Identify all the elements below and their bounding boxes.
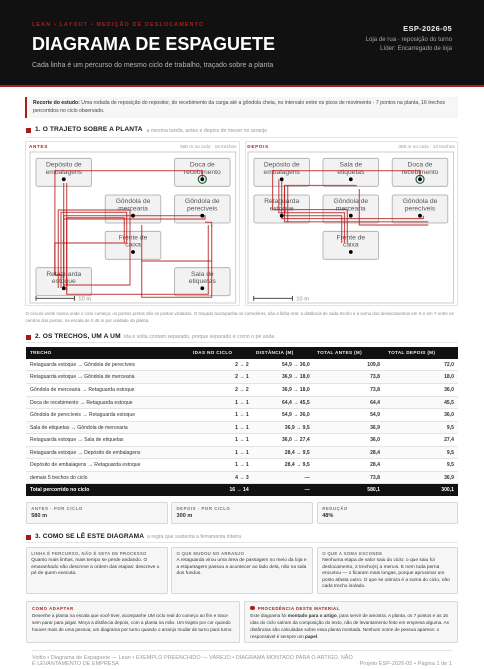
note: a soma: posto afasta outro. O que se otimiza é a soma do ciclo, não: [322, 578, 450, 583]
section 2 heading: [26, 332, 274, 340]
note: o que mudou: A retaguarda virou uma área de passagem no meio da loja e: [176, 558, 307, 563]
icon: red marker: [250, 606, 255, 610]
section 3 heading: 3. COMO SE LÊ ESTE DIAGRAMA: [35, 532, 144, 540]
chart: antes: Gôndola de: [116, 198, 151, 205]
callout: procedencia: Este diagrama foi montado para o artigo, para servir de amostra. A planta, os 7 pontos e as 16: [250, 613, 448, 618]
chart: antes: etiquetas: [189, 278, 217, 285]
table row: [26, 434, 458, 447]
table row: 28,4 → 9,5: [285, 450, 310, 456]
table row: 54,9: [370, 412, 380, 418]
chart: depois: recebimento: [402, 169, 439, 176]
note: a soma: encurtou — 1 ficaram mais longas, porque aproximar um: [322, 571, 444, 576]
table total row: [26, 484, 458, 496]
chart: depois: caixa: [343, 242, 359, 249]
table total row: 16 → 14: [229, 487, 249, 493]
table row: 36,0: [370, 437, 380, 443]
table: trechos: [26, 347, 458, 496]
table row: [26, 397, 458, 409]
stat: reducao: 48%: [322, 513, 333, 519]
study note: [25, 97, 458, 118]
chart: antes: Depósito de: [46, 162, 82, 169]
table row: 1 → 1: [235, 437, 249, 443]
chart: depois: 300 m no ciclo · 14 trechos: [398, 144, 455, 149]
chart: depois: Retaguarda: [264, 198, 299, 205]
table row: 1 → 1: [235, 450, 249, 456]
table total row: Total percorrido no ciclo: [30, 487, 89, 493]
table header: DISTÂNCIA (M): [256, 350, 294, 355]
section 3 heading: [26, 532, 241, 540]
footer left: Voitto • Diagrama de Espaguete — Lean • EXEMPLO PREENCHIDO — VAREJO • DIAGRAMA MONTADO PARA O ARTIGO, NÃO: [32, 654, 353, 660]
stat: depois: [171, 502, 313, 524]
chart: antes: ANTES: [29, 144, 48, 149]
chart: depois: DEPOIS: [247, 144, 269, 149]
panel: depois: [244, 141, 458, 306]
callout: procedencia: idas do ciclo saíram da composição do texto, não de levantamento feito em empresa alguma. As: [250, 620, 449, 625]
callout: como adaptar: Desenhe a planta na escala que você tiver, acompanhe UM ciclo real do começo ao fim e trace: [32, 613, 228, 618]
note: a soma: O QUE A SOMA ESCONDE: [322, 551, 382, 556]
chart: depois: Doca de: [408, 162, 433, 169]
note: a soma: deslocamento, 2 trecho(s) a menos. E nem toda perna: [322, 565, 439, 570]
table row: Retaguarda estoque → Gôndola de perecíveis: [30, 362, 135, 368]
diagram caption: O círculo verde marca onde o ciclo começa; os pontos pretos são os postos visitados. O traçado acompanha os corredores, não a linha reta: a distância de cada trecho é a soma dos deslocamentos em X e em Y entre os: [26, 310, 454, 316]
table row: [26, 472, 458, 484]
document code: ESP-2026-05: [403, 24, 452, 32]
callout: procedencia: responsável é sempre um papel.: [250, 634, 318, 639]
chart: depois: mercearia: [336, 205, 366, 212]
table row: Retaguarda estoque → Sala de etiquetas: [30, 437, 123, 443]
title: DIAGRAMA DE ESPAGUETE: [32, 34, 275, 54]
chart: depois: [247, 144, 455, 303]
note: o que mudou: dos fundos.: [176, 571, 202, 576]
table header: TOTAL DEPOIS (M): [388, 350, 435, 355]
table row: [26, 409, 458, 422]
chart: antes: caixa: [125, 242, 141, 249]
table total row: 300,1: [441, 487, 454, 493]
table row: 36,9 → 9,5: [285, 425, 310, 431]
table row: 54,9 → 36,0: [282, 362, 310, 368]
table row: Sala de etiquetas → Gôndola de mercearia: [30, 425, 128, 431]
table row: 36,0: [444, 412, 454, 418]
stat: depois: DEPOIS · POR CICLO: [176, 506, 230, 511]
chart: antes: Doca de: [190, 162, 215, 169]
stat: reducao: REDUÇÃO: [322, 506, 348, 511]
table row: 36,9 → 18,0: [282, 374, 310, 380]
note: linha e percurso: [26, 547, 168, 594]
chart: antes: Sala de: [191, 271, 214, 278]
table row: Gôndola de perecíveis → Retaguarda estoque: [30, 412, 135, 418]
note: o que mudou: [171, 547, 313, 594]
note: o que mudou: O QUE MUDOU NO ARRANJO: [176, 551, 244, 556]
chart: depois: Gôndola de: [334, 198, 368, 205]
table row: Retaguarda estoque → Depósito de embalagens: [30, 450, 140, 456]
diagram caption: [26, 310, 454, 323]
chart: depois: embalagens: [263, 169, 301, 176]
table row: 1 → 1: [235, 412, 249, 418]
footer left: É LEVANTAMENTO DE EMPRESA: [32, 661, 119, 667]
callout: procedencia: distâncias são calculadas sobre essa planta montada. Nenhum nome de pessoa aparece: o: [250, 627, 439, 632]
stat: depois: 300 m: [176, 513, 192, 519]
panel: antes: [25, 141, 240, 306]
table row: 28,4: [370, 450, 380, 456]
chart: depois: Depósito de: [264, 162, 300, 169]
table row: 27,4: [444, 437, 454, 443]
table row: 2 → 2: [235, 362, 249, 368]
note: linha e percurso: pé de quem executa.: [31, 571, 76, 576]
table row: [26, 371, 458, 384]
chart: depois: Gôndola de: [403, 198, 438, 205]
table row: 28,4: [370, 462, 380, 468]
table row: 2 → 1: [235, 374, 249, 380]
callout: procedencia: PROCEDÊNCIA DESTE MATERIAL: [258, 606, 340, 611]
table row: 72,0: [444, 362, 454, 368]
stat: antes: 580 m: [31, 513, 47, 519]
section 2 heading: ida e volta contam separado, porque separado é como o pé anda: [124, 334, 274, 340]
chart: antes: embalagens: [46, 169, 83, 176]
header band: [0, 0, 484, 87]
table row: 9,5: [447, 450, 454, 456]
chart: antes: Frente de: [119, 234, 148, 241]
table row: 54,9 → 36,0: [282, 412, 310, 418]
table header: IDAS NO CICLO: [193, 350, 232, 355]
chart: antes: perecíveis: [187, 205, 218, 212]
chart: depois: etiquetas: [337, 169, 365, 176]
footer right: Projeto ESP-2026-05 • Página 1 de 1: [360, 661, 452, 667]
chart: antes: Gôndola de: [185, 198, 220, 205]
study note: Recorte do estudo: Uma rodada de reposição do repositor, do recebimento da carga até a gôndola cheia, no intervalo entre os picos de movimento · 7 pontos na planta, 16 trechos: [33, 100, 445, 106]
table row: 36,0 → 27,4: [282, 437, 310, 443]
table row: [26, 459, 458, 472]
stat: antes: ANTES · POR CICLO: [31, 506, 83, 511]
study note: percorridos no ciclo observado.: [33, 108, 104, 114]
chart: depois: perecíveis: [405, 205, 436, 212]
callout: como adaptar: [26, 601, 240, 643]
table row: demais 5 trechos do ciclo: [30, 475, 87, 481]
document meta: [366, 36, 452, 52]
eyebrow: LEAN • LAYOUT • MEDIÇÃO DE DESLOCAMENTO: [32, 22, 204, 28]
table row: 1 → 1: [235, 462, 249, 468]
table row: [26, 447, 458, 459]
section 1 heading: a mesma tarefa, antes e depois de mexer no arranjo: [146, 128, 267, 134]
table header: [26, 347, 458, 359]
section 1 heading: 1. O TRAJETO SOBRE A PLANTA: [35, 126, 143, 133]
document meta: Líder: Encarregado de loja: [380, 45, 452, 52]
table row: 73,8: [370, 374, 380, 380]
section 3 heading: a regra que sustenta a ferramenta inteira: [147, 534, 241, 540]
note: linha e percurso: Quanto mais linhas, mais tempo se perde andando. O: [31, 558, 147, 563]
table header: TRECHO: [30, 350, 52, 355]
table total row: 580,1: [367, 487, 380, 493]
note: linha e percurso: emaranhado não descreve a ordem das etapas: descreve o: [31, 565, 159, 570]
table row: 73,8: [370, 475, 380, 481]
chart: antes: 580 m no ciclo · 16 trechos: [180, 144, 237, 149]
table row: 2 → 2: [235, 387, 249, 393]
table row: [26, 422, 458, 434]
chart: antes: 10 m: [78, 296, 91, 302]
chart: antes: recebimento: [184, 169, 221, 176]
chart: depois: estoque: [270, 205, 294, 212]
table row: [26, 359, 458, 371]
diagram caption: centros dos postos, na escala de 0,45 m por unidade da planta.: [26, 318, 149, 322]
section 2 heading: 2. OS TRECHOS, UM A UM: [35, 332, 121, 340]
table row: 36,0: [444, 387, 454, 393]
table row: 73,8: [370, 387, 380, 393]
table row: 28,4 → 9,5: [285, 462, 310, 468]
section 1 heading: [26, 126, 267, 134]
table row: Retaguarda estoque → Gôndola de mercearia: [30, 374, 134, 380]
chart: depois: 10 m: [296, 296, 309, 302]
callout: como adaptar: COMO ADAPTAR: [32, 606, 74, 611]
note: o que mudou: a etiquetagem passou a acontecer ao lado dela, não na sala: [176, 565, 306, 570]
document meta: Loja de rua · reposição do turno: [366, 36, 452, 42]
table row: 36,9: [444, 475, 454, 481]
note: a soma: Nenhuma etapa de valor saiu do ciclo: o que saiu foi: [322, 558, 435, 563]
note: a soma: [317, 547, 458, 594]
chart: antes: [29, 144, 237, 303]
table row: 45,5: [444, 400, 454, 406]
table row: 1 → 1: [235, 425, 249, 431]
table row: 9,5: [447, 425, 454, 431]
table row: Doca de recebimento → Retaguarda estoque: [30, 400, 133, 406]
callout: como adaptar: houver mais de uma pessoa; um diagrama por turno quando o arranjo mudar de turno para turno.: [32, 627, 233, 632]
callout: como adaptar: sem parar para julgar. Meça a distância depois, com a planta na mão. Um trajeto por cor quando: [32, 620, 231, 625]
table row: 1 → 1: [235, 400, 249, 406]
table row: Gôndola de mercearia → Retaguarda estoque: [30, 387, 134, 393]
table row: 36,9 → 18,0: [282, 387, 310, 393]
table row: [26, 384, 458, 397]
chart: antes: Retaguarda: [46, 271, 82, 278]
table row: 64,4: [370, 400, 380, 406]
chart: antes: estoque: [52, 278, 76, 285]
chart: depois: Sala de: [339, 162, 362, 169]
table row: 109,8: [367, 362, 380, 368]
stat: reducao: [317, 502, 458, 524]
chart: depois: Frente de: [336, 234, 365, 241]
chart: antes: mercearia: [118, 205, 148, 212]
stat: antes: [26, 502, 168, 524]
table row: 18,0: [444, 374, 454, 380]
table row: —: [305, 475, 310, 481]
note: a soma: cada trecho isolado.: [322, 584, 366, 589]
table row: 36,9: [370, 425, 380, 431]
table row: 4 → 3: [235, 475, 249, 481]
table row: 64,4 → 45,5: [282, 400, 310, 406]
table row: Depósito de embalagens → Retaguarda estoque: [30, 462, 140, 468]
callout: procedencia: [244, 601, 458, 643]
note: linha e percurso: LINHA É PERCURSO, NÃO É SETA DE PROCESSO: [31, 551, 147, 556]
table total row: —: [305, 487, 310, 493]
subtitle: Cada linha é um percurso do mesmo ciclo de trabalho, traçado sobre a planta: [32, 62, 273, 69]
footer left: [32, 654, 353, 667]
table row: 9,5: [447, 462, 454, 468]
table header: TOTAL ANTES (M): [317, 350, 362, 355]
